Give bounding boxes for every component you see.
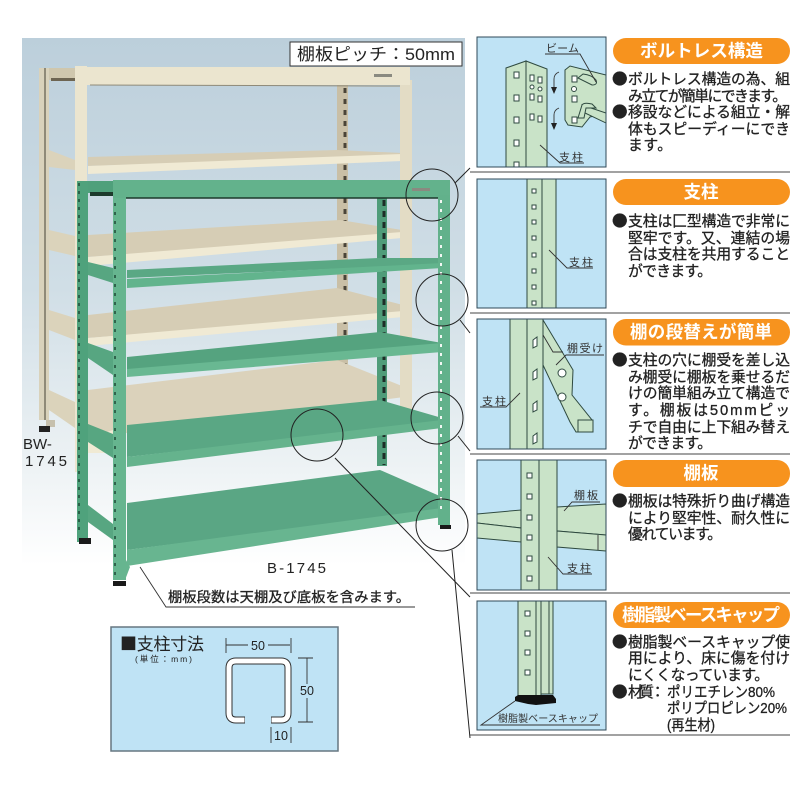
note: shelf count [140, 567, 415, 607]
text: easy shelf adjustment: けの簡単組み立て構造で [628, 384, 790, 402]
text: boltless structure: 移設などによる組立・解 [628, 104, 790, 121]
circle callouts and leader lines [291, 168, 470, 738]
text: shelf board: 優れています。 [628, 526, 722, 543]
panel: boltless illustration [477, 37, 606, 170]
text: easy shelf adjustment [612, 348, 790, 452]
label: post: 支柱 [567, 561, 591, 575]
heading: resin base cap: 樹脂製ベースキャップ [622, 605, 780, 625]
heading: easy shelf adjustment [613, 319, 790, 346]
panel: shelf support illustration [477, 315, 606, 455]
heading: shelf board: 棚板 [684, 463, 719, 483]
text: easy shelf adjustment: ができます。 [628, 435, 712, 452]
label: model BW-1745: BW- [23, 436, 52, 453]
diagram: C-section: 50 [300, 684, 314, 698]
label: shelf pitch [290, 42, 462, 66]
label: shelf support: 棚受け [567, 341, 603, 355]
label: post: 支柱 [559, 150, 583, 164]
unit note: (単位：mm) [135, 654, 192, 664]
heading: boltless structure: ボルトレス構造 [640, 41, 764, 61]
text: resin base cap: にくくなっています。 [628, 667, 769, 684]
label: shelf board: 棚板 [574, 488, 598, 502]
text: post: 支柱は匚型構造で非常に [628, 213, 790, 230]
text: resin base cap: ● [612, 630, 628, 652]
text: shelf board: 棚板は特殊折り曲げ構造 [628, 493, 790, 510]
panel: shelf board illustration [477, 456, 606, 596]
label: model B-1745: B-1745 [267, 560, 326, 577]
text: post: 合は支柱を共用すること [628, 246, 790, 263]
label: post: 支柱 [569, 255, 593, 269]
text: resin base cap: 用により、床に傷を付け [628, 650, 790, 667]
text: resin base cap: ポリエチレン80% [667, 684, 775, 701]
heading: resin base cap [613, 602, 790, 628]
text: resin base cap [612, 630, 790, 734]
diagram: C-section: 10 [274, 729, 288, 743]
text: post: 堅牢です。又、連結の場 [628, 230, 790, 247]
dividers [470, 172, 790, 735]
text: easy shelf adjustment: み棚受に棚板を乗せるだ [628, 369, 790, 386]
panel: post dimensions [111, 627, 338, 751]
panel: post illustration [477, 175, 606, 315]
text: resin base cap: (再生材) [667, 717, 715, 734]
beige shelf BW-1745 [39, 66, 412, 472]
label: shelf pitch: 棚板ピッチ：50mm [297, 45, 455, 64]
text: boltless structure: ます。 [628, 137, 672, 154]
heading: post dimensions: ■支柱寸法 [120, 630, 204, 655]
green shelf B-1745 [77, 180, 451, 586]
text: shelf board: ● [612, 489, 628, 511]
diagram: C-section [226, 638, 314, 743]
text: resin base cap: ポリプロピレン20% [667, 700, 787, 717]
heading: post [613, 179, 790, 205]
text: resin base cap: 材質： [628, 683, 665, 701]
photo background [22, 38, 465, 593]
text: resin base cap: ● [612, 680, 628, 702]
text: post: ができます。 [628, 263, 712, 280]
text: easy shelf adjustment: す。棚板は50mmピッ [628, 402, 790, 419]
text: easy shelf adjustment: 支柱の穴に棚受を差し込 [628, 352, 790, 369]
note: shelf count: 棚板段数は天棚及び底板を含みます。 [168, 590, 410, 606]
heading: shelf board [613, 460, 790, 487]
label: post: 支柱 [482, 394, 506, 408]
text: easy shelf adjustment: チで自由に上下組み替え [628, 419, 790, 436]
text: boltless structure [612, 67, 790, 154]
text: boltless structure: ● [612, 67, 628, 89]
text: boltless structure: み立てが簡単にできます。 [628, 87, 787, 105]
label: beam: ビーム [546, 42, 579, 55]
text: easy shelf adjustment: ● [612, 348, 628, 370]
text: post [612, 209, 790, 280]
text: resin base cap: 樹脂製ベースキャップ使 [628, 634, 790, 651]
text: boltless structure: ● [612, 100, 628, 122]
text: shelf board: により堅牢性、耐久性に [628, 510, 790, 527]
heading: boltless structure [613, 38, 790, 64]
label: model BW-1745: 1745 [25, 453, 67, 470]
text: boltless structure: 体もスピーディーにでき [628, 120, 790, 138]
heading: easy shelf adjustment: 棚の段替えが簡単 [630, 322, 772, 342]
heading: post: 支柱 [684, 182, 719, 202]
text: shelf board [612, 489, 790, 543]
label: model BW-1745 [23, 436, 67, 470]
panel: base cap illustration [477, 598, 606, 730]
diagram: C-section: 50 [251, 639, 265, 653]
text: boltless structure: ボルトレス構造の為、組 [628, 71, 790, 88]
label: resin base cap: 樹脂製ベースキャップ [498, 712, 598, 725]
text: post: ● [612, 209, 628, 231]
